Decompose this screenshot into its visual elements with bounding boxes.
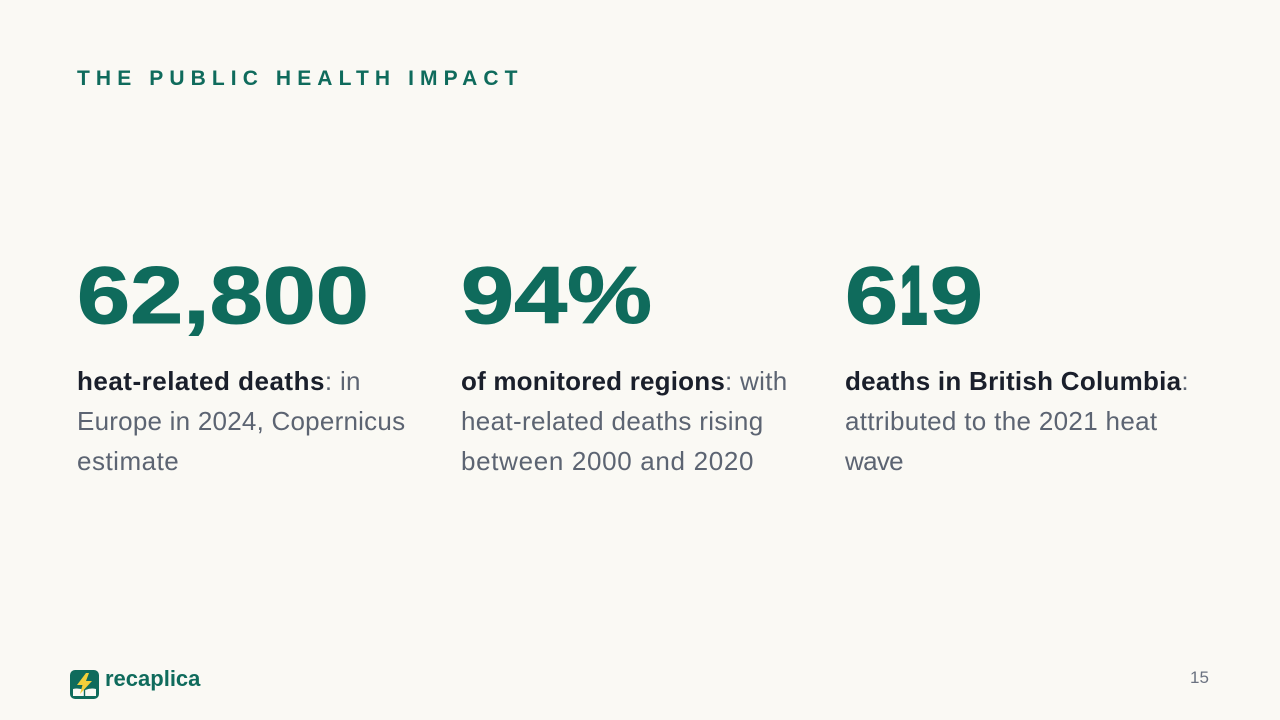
description: heat-related deaths <box>77 366 405 476</box>
description: monitored regions: heat-related deaths rising <box>461 406 764 436</box>
description: heat-related deaths: estimate <box>77 446 179 476</box>
description: British Columbia deaths: wave <box>845 446 903 476</box>
description: British Columbia deaths <box>845 366 1189 476</box>
description: heat-related deaths: heat-related deaths: in <box>77 366 361 396</box>
big number: 619 <box>845 251 983 341</box>
big number: 619: 9 <box>930 251 983 341</box>
description: monitored regions: between 2000 and 2020 <box>461 446 754 476</box>
big number: 62,800: 62,800 <box>77 251 369 341</box>
big number: 619: 6 <box>845 251 898 341</box>
panel: stat 94% <box>461 251 787 476</box>
description: monitored regions <box>461 366 787 476</box>
description: monitored regions: of monitored regions: with <box>461 366 787 396</box>
panel: stat 619 <box>845 251 1189 476</box>
page number: 15 <box>1190 668 1209 687</box>
description: British Columbia deaths: deaths in British Columbia: <box>845 366 1189 396</box>
panel: stat 62,800 <box>77 251 405 476</box>
title: THE PUBLIC HEALTH IMPACT <box>77 67 524 90</box>
brand name: recaplica <box>105 666 200 691</box>
big number: 94%: 94% <box>461 251 652 341</box>
description: heat-related deaths: Europe in 2024, Copernicus <box>77 406 405 436</box>
big number: 619: 1 <box>900 251 927 341</box>
icon: recaplica logo <box>70 670 99 699</box>
description: British Columbia deaths: attributed to the 2021 heat <box>845 406 1157 436</box>
